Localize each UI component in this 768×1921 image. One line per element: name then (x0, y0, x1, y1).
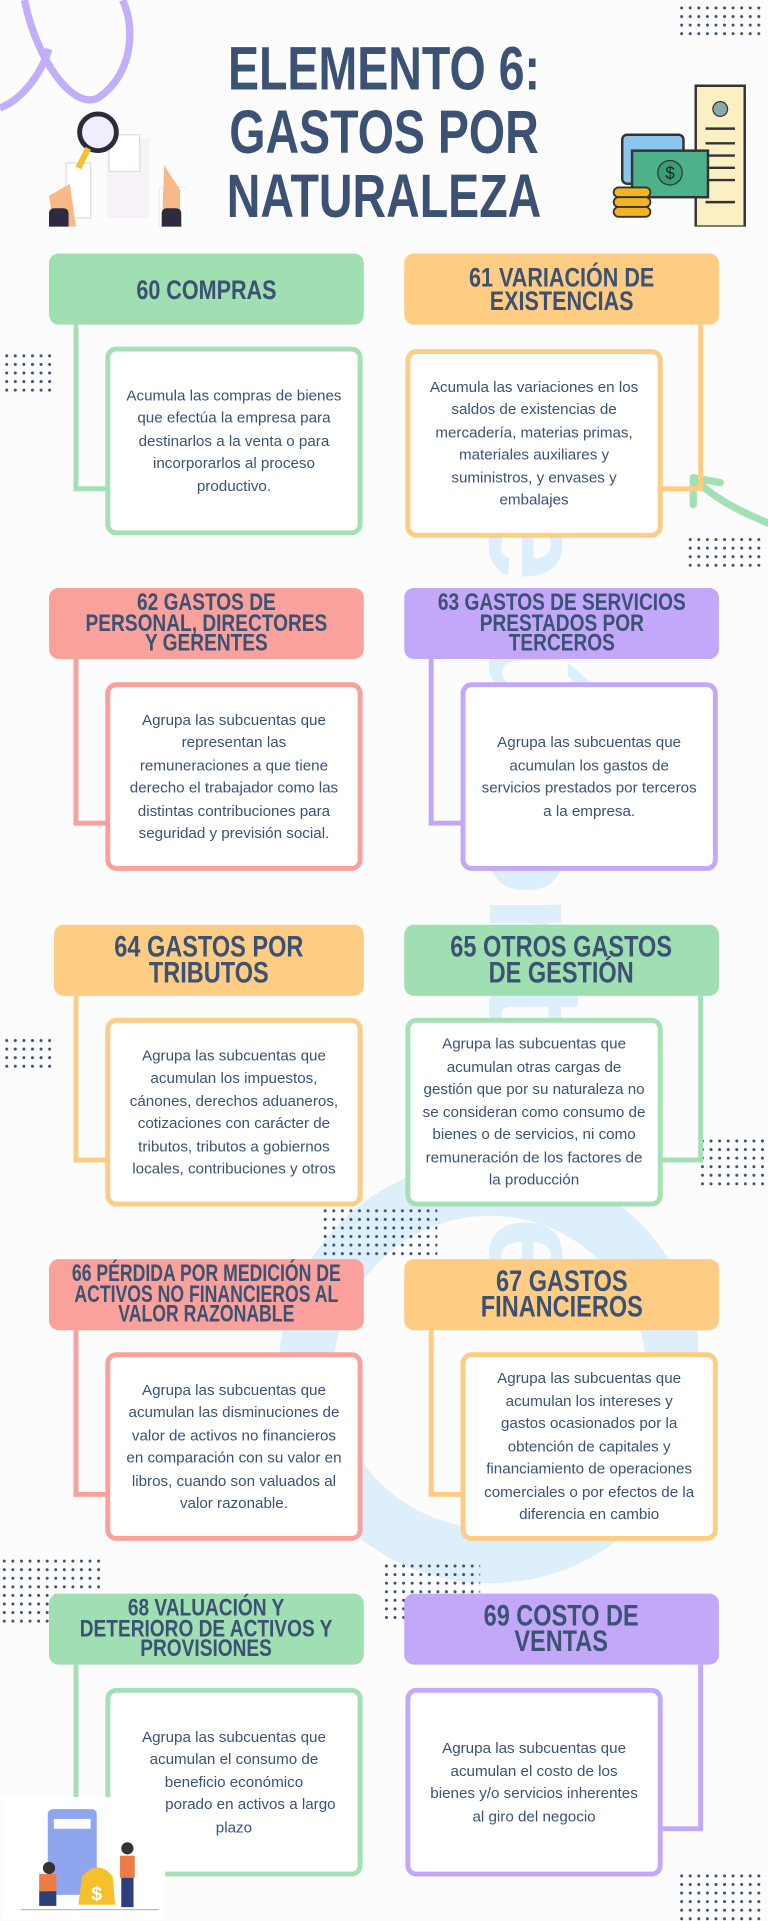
text: EXISTENCIAS (490, 285, 633, 316)
panel: 67 financieros (404, 1259, 719, 1541)
panel: 68 valuacion (49, 1594, 364, 1876)
text: TERCEROS (509, 630, 615, 657)
text: 61 VARIACIÓN DE (469, 262, 654, 293)
text: Agrupa las subcuentas que acumulan los gastos de servicios prestados por terceros a la empresa. (482, 734, 697, 819)
title (227, 34, 541, 230)
text: PRESTADOS POR (480, 610, 644, 637)
text: 63 GASTOS DE SERVICIOS (438, 589, 686, 616)
text: 69 COSTO DE (484, 1600, 639, 1633)
icon: calculator people: $ (91, 1883, 102, 1905)
panel: 63 servicios (404, 588, 719, 871)
panel: 69 costo ventas (404, 1594, 719, 1876)
arrow: green (690, 474, 768, 527)
text: Agrupa las subcuentas que acumulan otras cargas de gestión que por su naturaleza no se consideran como consumo de bienes o de servicios, ni como remuneración de los factores de la producción (423, 1035, 645, 1188)
text: TRIBUTOS (149, 957, 269, 990)
text: Y GERENTES (145, 630, 268, 657)
text: Agrupa las subcuentas que acumulan los intereses y gastos ocasionados por la obtención de capitales y financiamiento de operaciones comerciales o por efectos de la diferencia en cambio (484, 1370, 694, 1523)
text: PROVISIONES (141, 1636, 272, 1662)
decoration: purple loop (0, 0, 134, 112)
text: Agrupa las subcuentas que acumulan el consumo de beneficio económico incorporado en activos a largo plazo (132, 1728, 336, 1836)
icon: money and receipt (612, 84, 746, 227)
text: VALOR RAZONABLE (118, 1301, 294, 1328)
watermark: PerúContable (461, 416, 612, 1292)
panel: 62 personal (49, 588, 364, 871)
panel: 61 variacion (404, 254, 719, 538)
title: ELEMENTO 6: (228, 34, 540, 103)
text: 64 GASTOS POR (114, 931, 303, 964)
text: FINANCIEROS (481, 1291, 643, 1324)
text: Agrupa las subcuentas que representan las remuneraciones a que tiene derecho el trabajador como las distintas contribuciones para seguridad y previsión social. (130, 711, 338, 841)
panel: 65 otros gastos (404, 924, 719, 1206)
watermark (280, 416, 698, 1583)
text: 67 GASTOS (496, 1265, 627, 1298)
panel: 66 perdida (49, 1259, 364, 1541)
decoration dots (677, 4, 763, 40)
text: Acumula las compras de bienes que efectúa la empresa para destinarlos a la venta o para incorporarlos al proceso productivo. (126, 387, 342, 495)
text: Agrupa las subcuentas que acumulan el costo de los bienes y/o servicios inherentes al giro del negocio (430, 1739, 638, 1824)
text: 60 COMPRAS (136, 274, 276, 304)
text: Agrupa las subcuentas que acumulan las disminuciones de valor de activos no financieros en comparación con su valor en libros, cuando son valuados al valor razonable. (126, 1381, 342, 1512)
panel: 64 tributos (54, 924, 364, 1206)
title: GASTOS POR (229, 98, 539, 167)
text: 66 PÉRDIDA POR MEDICIÓN DE (72, 1261, 341, 1288)
icon: calculator people (20, 1797, 166, 1910)
text: DETERIORO DE ACTIVOS Y (80, 1615, 333, 1642)
text: Acumula las variaciones en los saldos de existencias de mercadería, materias primas, materiales auxiliares y suministros, y envases y embalajes (430, 378, 638, 508)
text: PERSONAL, DIRECTORES (86, 610, 327, 637)
text: Agrupa las subcuentas que acumulan los impuestos, cánones, derechos aduaneros, cotizaciones con carácter de tributos, tributos a gobiernos locales, contribuciones y otros (130, 1047, 338, 1177)
title: NATURALEZA (227, 162, 541, 230)
text: 68 VALUACIÓN Y (128, 1595, 285, 1622)
text: VENTAS (515, 1625, 608, 1658)
icon: money and receipt: $ (665, 163, 675, 183)
icon: magnifier with documents (48, 112, 186, 227)
text: 65 OTROS GASTOS (451, 931, 672, 964)
text: ACTIVOS NO FINANCIEROS AL (74, 1281, 338, 1308)
text: DE GESTIÓN (489, 957, 634, 990)
text: 62 GASTOS DE (137, 589, 276, 616)
panel: 60 compras (49, 254, 364, 536)
